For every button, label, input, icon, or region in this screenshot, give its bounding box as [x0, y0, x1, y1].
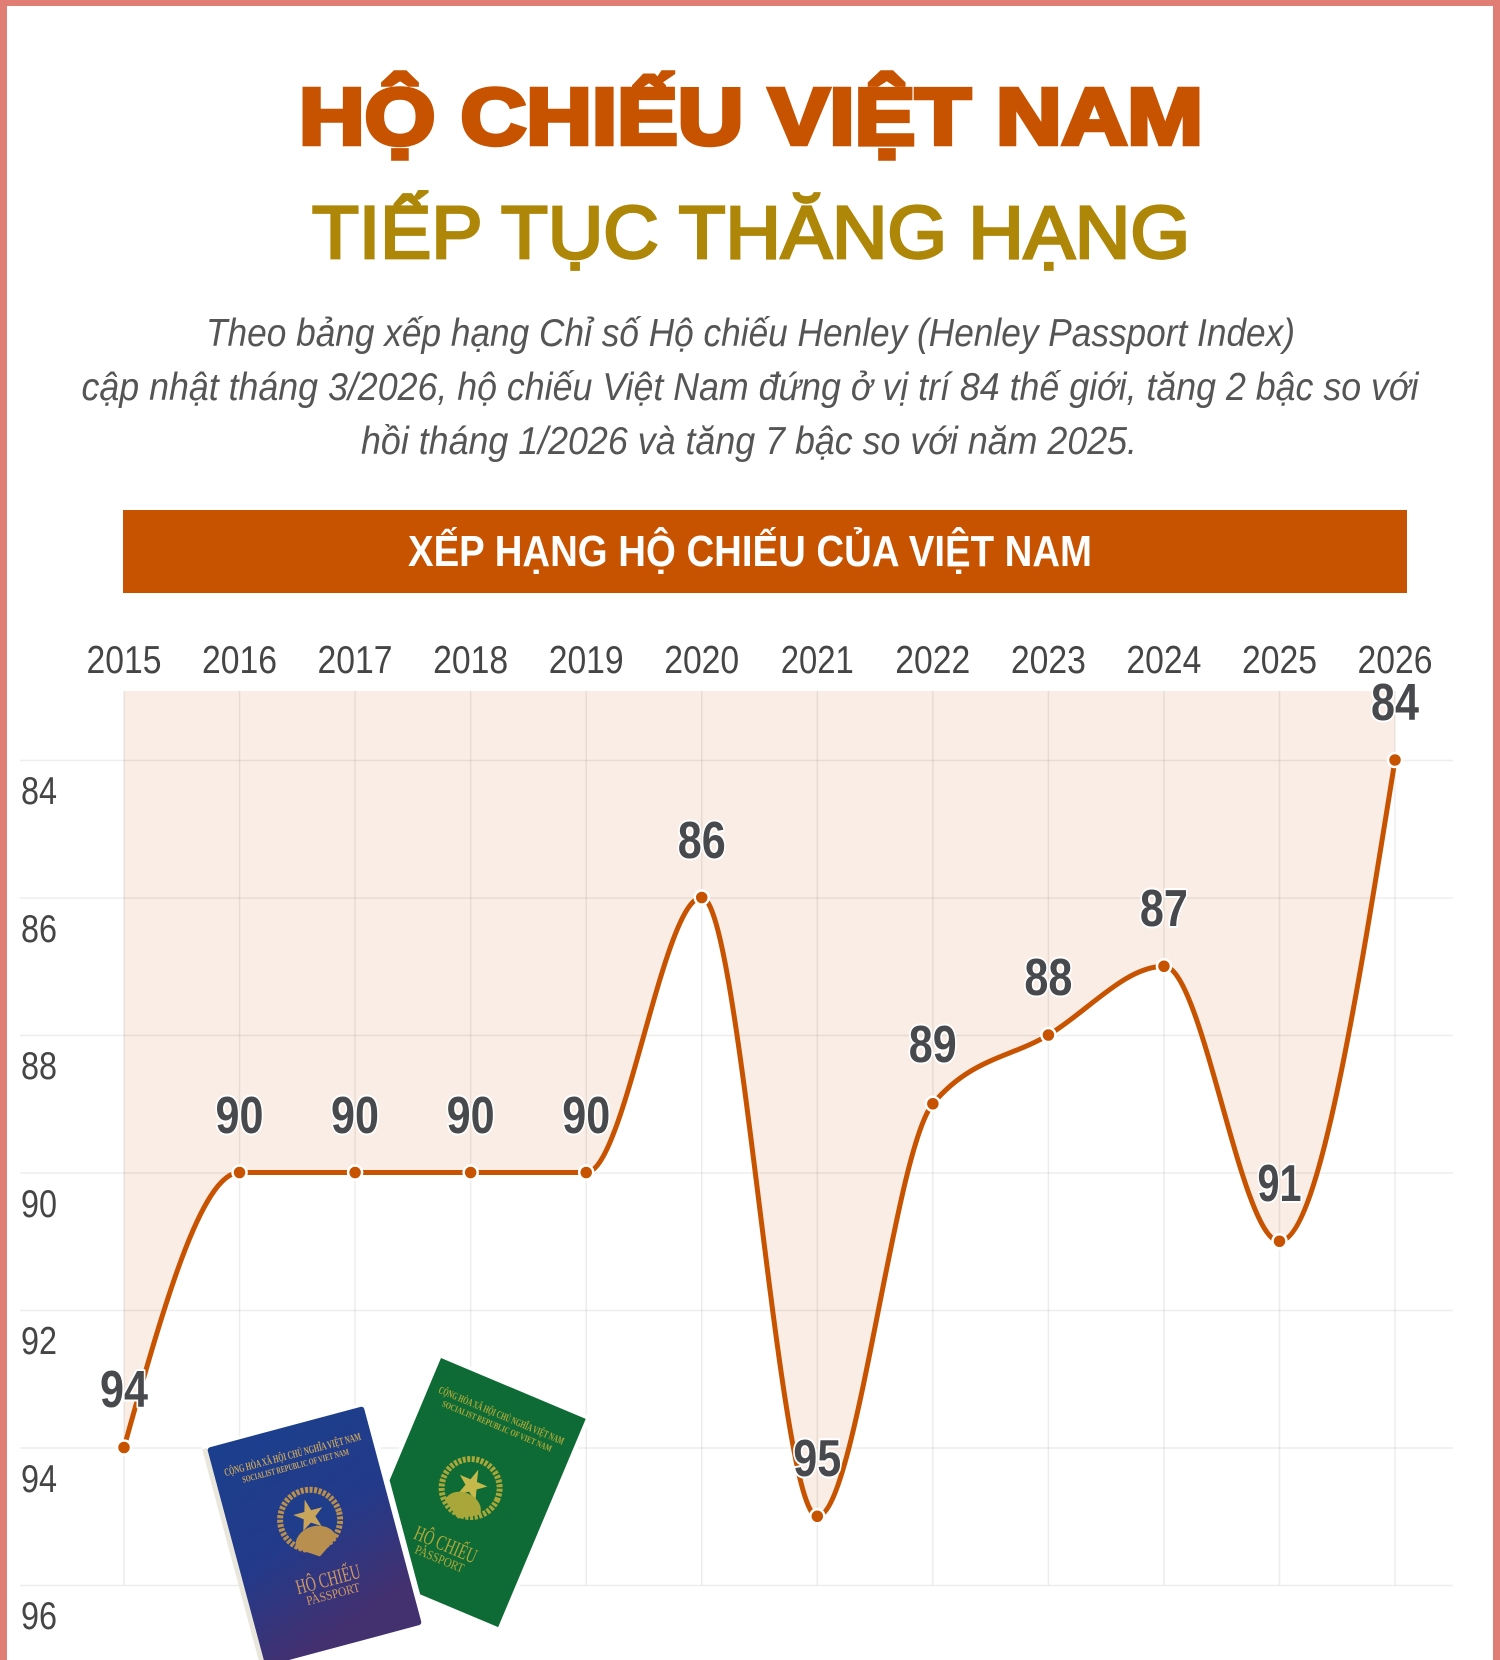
image: green passport: PASSPORT: [413, 1542, 467, 1576]
year axis: 2024: [1126, 639, 1201, 682]
image: green passport: [348, 1353, 591, 1632]
intro paragraph: [82, 312, 1420, 463]
value labels: 88: [1024, 949, 1072, 1007]
rank axis: 86: [21, 908, 57, 951]
rank axis: 90: [21, 1183, 57, 1226]
year axis: [86, 639, 1432, 682]
emblem: [273, 1483, 349, 1564]
chart banner: [123, 510, 1407, 593]
image: green passport: CỘNG HÒA XÃ HỘI CHỦ NGHĨA VIỆT NAM: [437, 1383, 566, 1448]
data points: [117, 753, 1402, 1523]
value labels: 87: [1140, 880, 1188, 938]
value labels: 95: [793, 1430, 841, 1488]
image: blue passport: SOCIALIST REPUBLIC OF VIET NAM: [241, 1447, 350, 1485]
value labels: [100, 674, 1419, 1488]
rank axis: [21, 770, 57, 1638]
title: HỘ CHIẾU VIỆT NAM: [299, 72, 1203, 161]
value labels: 91: [1258, 1155, 1302, 1213]
emblem: [431, 1450, 509, 1530]
rank axis: 88: [21, 1045, 57, 1088]
year axis: 2026: [1358, 639, 1432, 682]
value labels: 90: [562, 1087, 610, 1145]
chart banner: XẾP HẠNG HỘ CHIẾU CỦA VIỆT NAM: [408, 525, 1092, 576]
subtitle: TIẾP TỤC THĂNG HẠNG: [312, 191, 1190, 274]
year axis: 2017: [318, 639, 392, 682]
year axis: 2015: [86, 639, 162, 682]
value labels: 94: [100, 1361, 148, 1419]
image: blue passport: HỘ CHIẾU: [293, 1559, 363, 1599]
value labels: 90: [331, 1087, 379, 1145]
value labels: 89: [909, 1016, 957, 1074]
year axis: 2016: [202, 639, 277, 682]
image: green passport: HỘ CHIẾU: [411, 1521, 481, 1568]
rank axis: 92: [21, 1320, 57, 1363]
image: blue passport: CỘNG HÒA XÃ HỘI CHỦ NGHĨA VIỆT NAM: [223, 1430, 363, 1479]
image: blue passport: [201, 1402, 429, 1660]
value labels: 84: [1371, 674, 1419, 732]
rank axis: 96: [21, 1595, 57, 1638]
year axis: 2020: [664, 639, 739, 682]
rank axis: 84: [21, 770, 57, 813]
intro paragraph: Theo bảng xếp hạng Chỉ số Hộ chiếu Henley (Henley Passport Index): [206, 312, 1295, 355]
year axis: 2019: [549, 639, 624, 682]
year axis: 2023: [1011, 639, 1086, 682]
year axis: 2021: [781, 639, 854, 682]
line chart: [20, 639, 1453, 1638]
year axis: 2022: [895, 639, 970, 682]
year axis: 2018: [433, 639, 508, 682]
intro paragraph: hồi tháng 1/2026 và tăng 7 bậc so với năm 2025.: [361, 420, 1137, 463]
rank line: [124, 760, 1395, 1516]
value labels: 90: [216, 1087, 264, 1145]
rank axis: 94: [21, 1458, 57, 1501]
value labels: 90: [447, 1087, 495, 1145]
year axis: 2025: [1242, 639, 1317, 682]
image: green passport: SOCIALIST REPUBLIC OF VIET NAM: [441, 1399, 554, 1454]
shaded area above the line: [124, 691, 1395, 1516]
value labels: 86: [678, 812, 726, 870]
intro paragraph: cập nhật tháng 3/2026, hộ chiếu Việt Nam đứng ở vị trí 84 thế giới, tăng 2 bậc so với: [82, 366, 1420, 409]
image: blue passport: PASSPORT: [305, 1579, 362, 1608]
